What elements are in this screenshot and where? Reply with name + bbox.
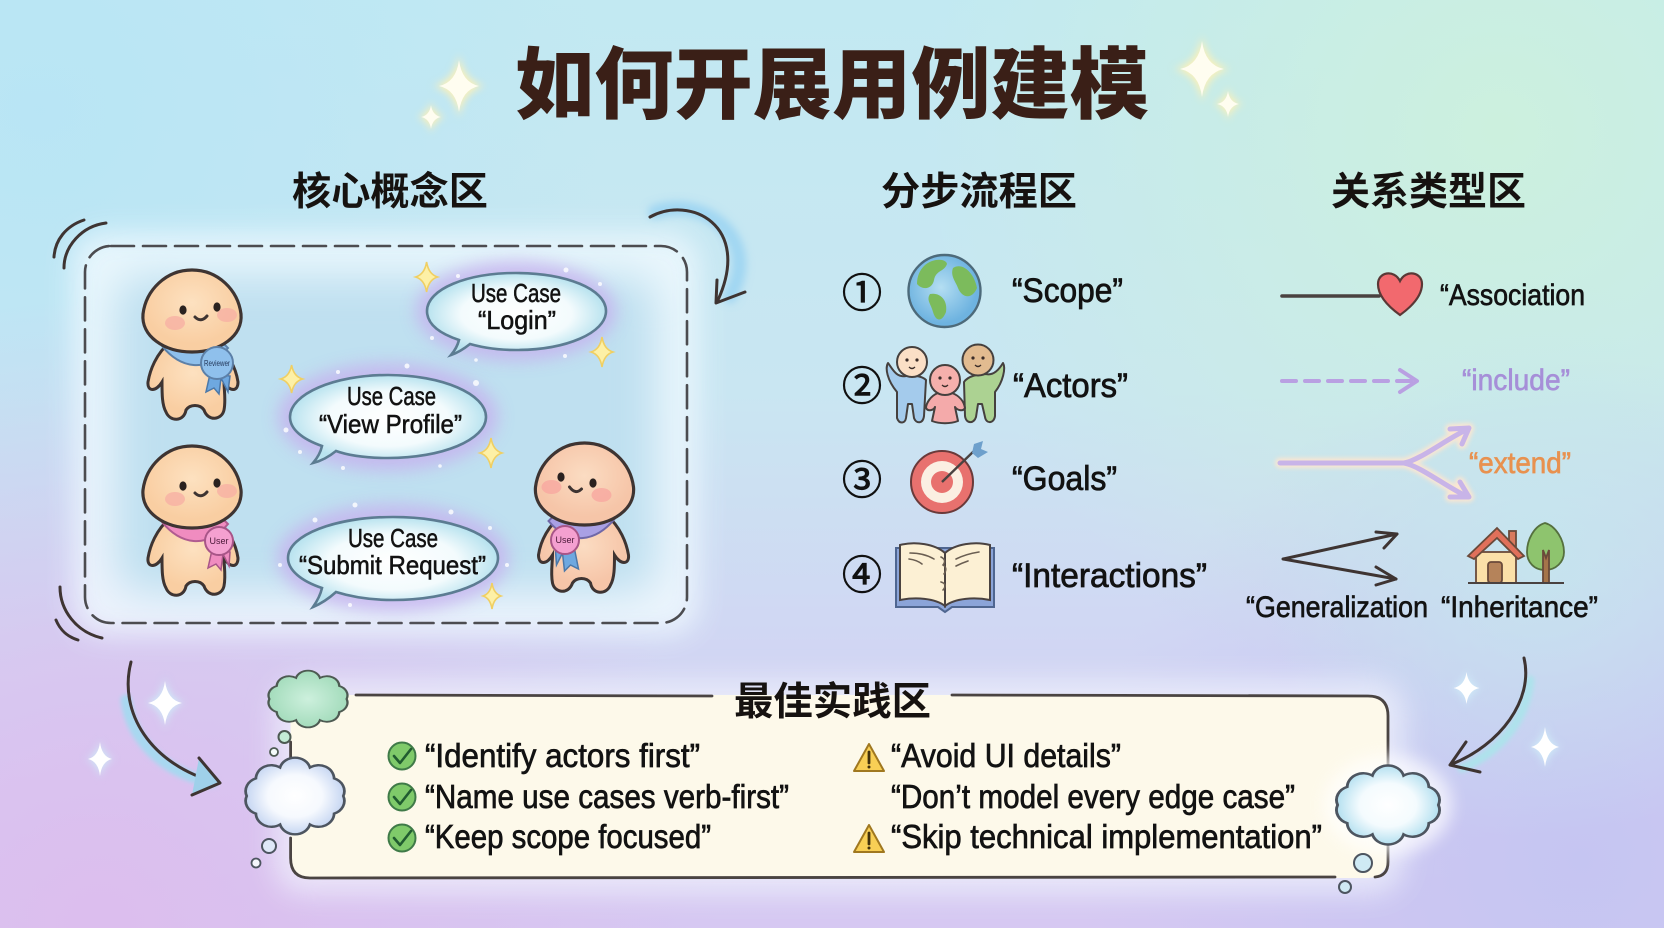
avoid item 1: “Avoid UI details”	[891, 737, 1121, 774]
gold sparkles	[281, 262, 613, 609]
avoid item 2: “Don’t model every edge case”	[891, 778, 1295, 815]
label: “Inheritance”	[1441, 591, 1598, 624]
icon: tree	[1527, 523, 1564, 583]
actor: purple scarf	[535, 443, 634, 592]
icon: three people	[887, 344, 1004, 423]
actor: pink badge: User	[209, 536, 229, 546]
do item 3: “Keep scope focused”	[425, 818, 711, 855]
heading: step process: 分步流程区	[881, 171, 1077, 214]
use case bubble: login: “Login”	[478, 305, 556, 335]
step 2: actors	[842, 344, 1128, 423]
number 3: ③	[842, 459, 882, 503]
branching arrow	[1280, 428, 1469, 497]
number 1: ①	[842, 272, 882, 316]
actor: purple scarf: User	[555, 535, 575, 545]
heading: best practices: 最佳实践区	[734, 681, 931, 724]
title: 如何开展用例建模	[515, 41, 1149, 129]
use case bubble: submit request	[277, 502, 509, 612]
label: “Generalization	[1246, 591, 1428, 624]
actor: blue badge	[143, 270, 241, 419]
relation: include	[1282, 364, 1570, 397]
number 2: ②	[842, 365, 882, 409]
icon: book	[896, 543, 994, 612]
relation: inheritance	[1441, 523, 1598, 624]
relation: extend	[1280, 428, 1571, 497]
relation: association	[1282, 273, 1585, 315]
dashed arrow	[1282, 370, 1417, 392]
relation: generalization	[1246, 532, 1428, 624]
arrow: bottom left curve	[126, 662, 220, 795]
white sparkles	[86, 668, 1562, 779]
open arrows	[1283, 532, 1397, 585]
cloud: green	[269, 671, 347, 756]
use case bubble: submit request: “Submit Request”	[299, 550, 486, 580]
avoid list	[854, 737, 1322, 855]
panel: core concepts	[74, 234, 698, 634]
heading: relationship types: 关系类型区	[1331, 171, 1526, 214]
label: “include”	[1462, 364, 1570, 397]
step 4: interactions	[842, 543, 1207, 612]
label: “Goals”	[1012, 460, 1117, 498]
panel: best practices	[246, 671, 1452, 894]
step 3: goals	[842, 441, 1117, 513]
cloud: white right	[1324, 755, 1452, 893]
label: “Interactions”	[1012, 557, 1207, 595]
icon: globe	[908, 255, 980, 327]
arrow: top right curve	[650, 208, 745, 303]
step 1: scope	[842, 255, 1123, 327]
label: “extend”	[1469, 447, 1571, 480]
do list	[388, 737, 789, 855]
number 4: ④	[842, 554, 882, 598]
heading: core concepts: 核心概念区	[292, 171, 488, 214]
use case bubble: submit request: Use Case	[348, 523, 438, 553]
icon: house	[1468, 528, 1524, 583]
cloud: white left	[246, 758, 344, 868]
avoid item 3: “Skip technical implementation”	[891, 818, 1322, 855]
use case bubble: view profile	[278, 363, 498, 471]
use case bubble: login: Use Case	[471, 278, 561, 308]
do item 2: “Name use cases verb-first”	[425, 778, 789, 815]
do item 1: “Identify actors first”	[425, 737, 700, 774]
label: “Actors”	[1013, 367, 1128, 405]
use case bubble: view profile: Use Case	[347, 381, 436, 411]
use case bubble: view profile: “View Profile”	[319, 409, 462, 439]
use case bubble: login	[416, 261, 616, 362]
actor: pink badge	[143, 446, 241, 595]
arrow: bottom right curve	[1450, 658, 1530, 772]
line	[1282, 294, 1379, 298]
motion arcs around the panel	[54, 220, 106, 640]
icon: target	[911, 441, 988, 513]
title sparkles	[417, 35, 1243, 133]
label: “Scope”	[1012, 272, 1123, 310]
icon: heart	[1378, 273, 1422, 315]
actor: blue badge: Reviewer	[204, 359, 230, 368]
label: “Association	[1440, 279, 1585, 312]
